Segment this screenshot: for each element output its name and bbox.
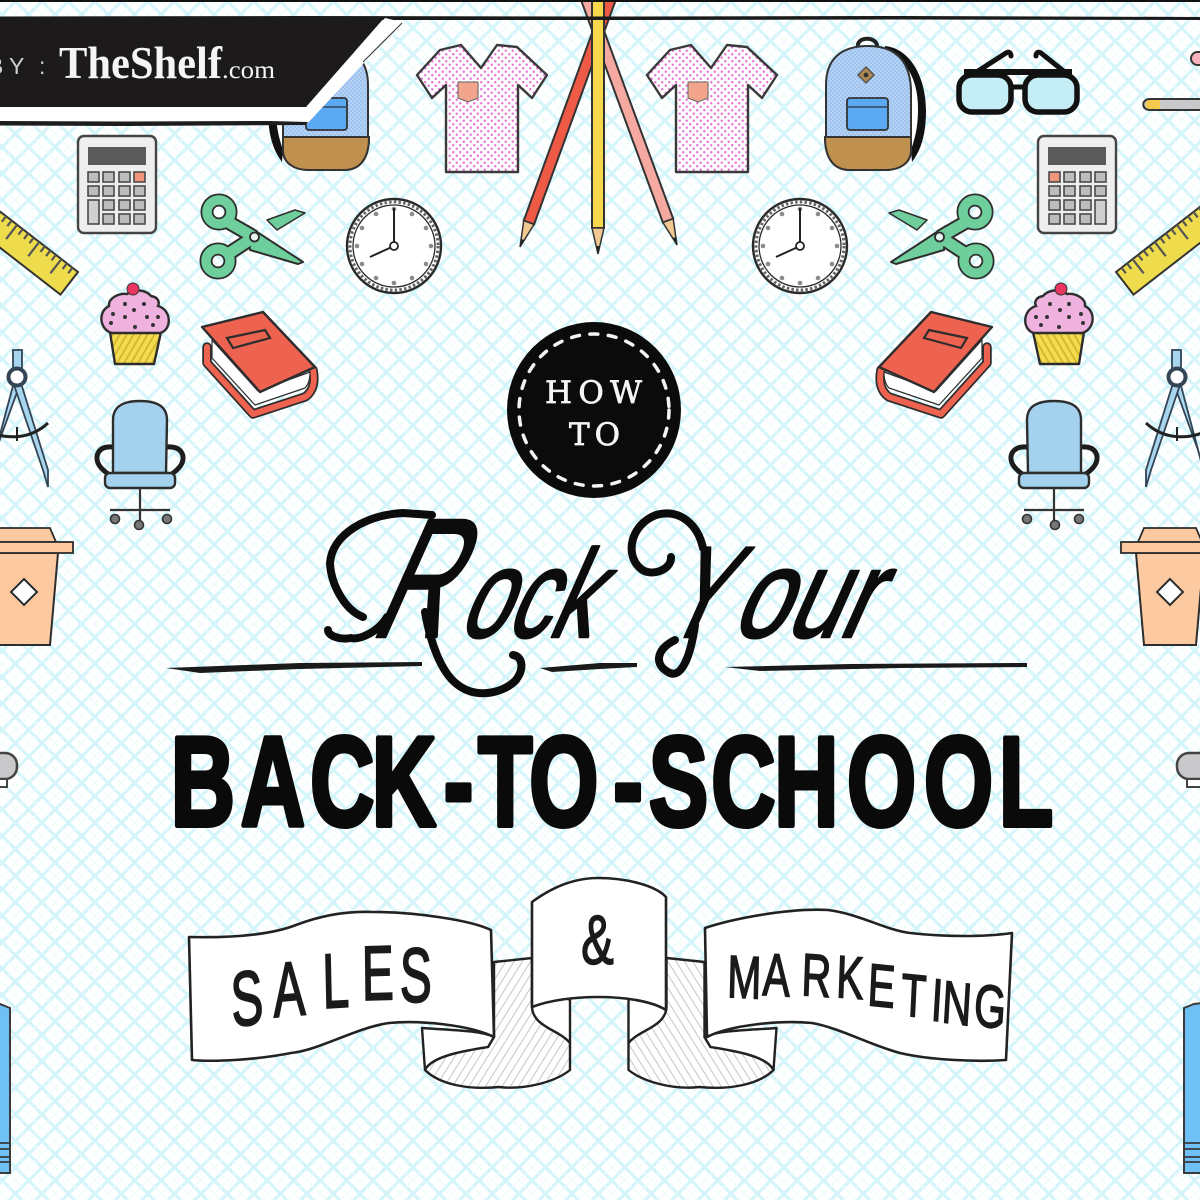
icon: glasses: [959, 52, 1077, 112]
icon: left gray item: [0, 753, 17, 787]
credit banner: [0, 17, 402, 126]
ribbon back right fold: [628, 958, 776, 1088]
ribbon text: marketing: MARKETING: [727, 941, 1008, 1042]
icon: left clock: [347, 199, 441, 293]
icon: red, pink and yellow crossed pencils: [515, 0, 682, 254]
icon: right coffee cup: [1121, 528, 1200, 645]
icon: right ruler: [1116, 186, 1200, 295]
script letter group: Rock: ock: [444, 525, 639, 664]
ribbon text: ampersand: &: [581, 900, 614, 979]
badge: how to: [507, 322, 681, 498]
icon: left cupcake: [101, 283, 169, 364]
icon: partial pencil at right edge: [1143, 99, 1200, 110]
icon: left chair: [97, 401, 183, 530]
icon: right compass: [1146, 350, 1200, 487]
icon: pink pencil: [572, 0, 682, 247]
icon: right gray item: [1177, 753, 1200, 787]
icon: red pencil: [515, 0, 624, 249]
script flourishes: [328, 513, 703, 693]
main heading: BACK-TO-SCHOOL: [171, 712, 1053, 853]
icon: yellow pencil: [592, 0, 604, 254]
icon: right backpack: [825, 39, 926, 170]
credit text: TheShelf.com: TheShelf: [59, 37, 223, 88]
ribbon back left fold: [422, 958, 570, 1088]
icon: left blue book: [0, 1000, 10, 1173]
icon: right scissors: [889, 200, 988, 273]
ribbon text: sales: SALES: [229, 929, 432, 1044]
ribbon banner: [189, 878, 1012, 1088]
ribbon panel: sales: [189, 912, 494, 1061]
badge text: TO: [569, 417, 620, 453]
icon: left backpack: [268, 39, 369, 170]
icon: left scissors: [206, 200, 305, 273]
ribbon panel: marketing: [705, 910, 1012, 1061]
icon: right cupcake: [1025, 283, 1093, 364]
rule center of script: [540, 663, 637, 672]
script letter group: Your: our: [717, 525, 918, 664]
script letter group: Your: Y: [648, 519, 769, 665]
icon: right chair: [1011, 401, 1097, 530]
top rule line: [0, 16, 1200, 20]
rule right of script: [725, 663, 1027, 671]
script heading: Rock Your: [328, 483, 918, 693]
icon: left calculator: [78, 136, 156, 233]
icon: right shirt: [647, 45, 777, 172]
icon: left ruler: [0, 186, 78, 295]
icon: right blue book: [1184, 1000, 1200, 1173]
script letter group: Rock: R: [352, 483, 510, 673]
credit text: TheShelf.com: .com: [222, 57, 276, 84]
icon: right book: [879, 312, 992, 414]
badge text: HOW: [545, 375, 642, 411]
icon: left coffee cup: [0, 528, 73, 645]
icon: left book: [202, 312, 315, 414]
ribbon panel: ampersand: [532, 878, 666, 1010]
icon: right clock: [753, 199, 847, 293]
icon: left shirt: [417, 45, 547, 172]
script letter group: Rock: [352, 483, 639, 673]
rule left of script: [166, 662, 422, 673]
icon: partial pink eraser at right edge: [1191, 52, 1200, 65]
icon: right calculator: [1038, 136, 1116, 233]
top edge bar: [0, 0, 1200, 2]
icon: left compass: [0, 350, 48, 487]
